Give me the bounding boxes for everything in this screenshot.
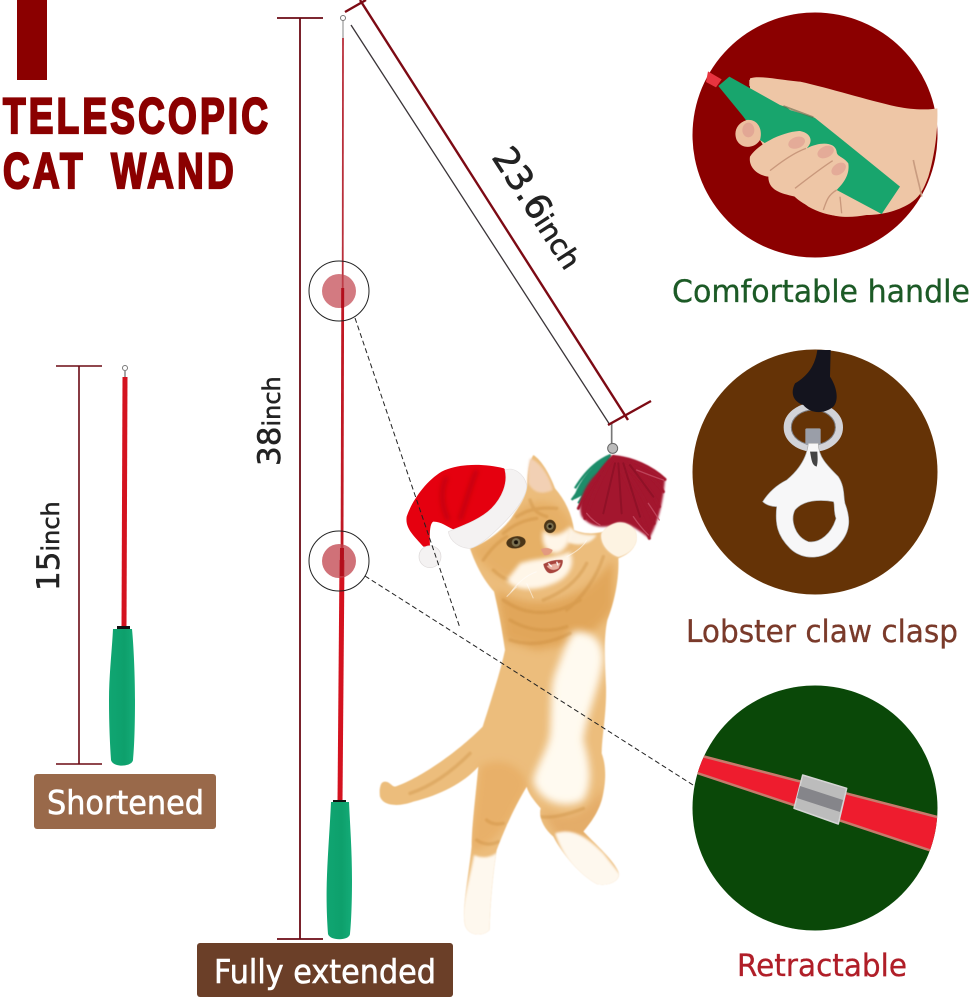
extended length label: 38inch	[252, 376, 288, 466]
title: CAT WAND	[3, 144, 237, 199]
cat body	[370, 447, 647, 940]
panel: comfortable handle	[692, 12, 938, 258]
title	[3, 0, 271, 199]
claw body	[763, 443, 849, 557]
red plume	[580, 456, 665, 538]
badge: fully extended: Fully extended	[214, 952, 436, 991]
callout: lower joint	[309, 531, 369, 591]
cat chest and leg whites	[533, 631, 603, 805]
title accent bar	[17, 0, 47, 80]
cat	[370, 447, 647, 940]
diagonal dimension	[345, 0, 651, 425]
santa hat	[406, 465, 527, 568]
label: lobster claw clasp: Lobster claw clasp	[686, 614, 958, 650]
grip	[718, 77, 900, 214]
ring	[787, 407, 839, 448]
extended dimension line	[277, 18, 323, 939]
index, middle and ring fingers	[735, 120, 761, 147]
extended wand	[327, 16, 352, 939]
feather toy	[572, 423, 665, 557]
cat fur stripes	[410, 500, 603, 844]
shortened dimension line	[56, 366, 102, 764]
shortened badge: Shortened	[47, 783, 204, 822]
dashed leader to upper joint	[355, 318, 460, 628]
icon: tube joint	[697, 756, 945, 853]
diagonal length label: 23.6inch	[483, 140, 591, 276]
title: TELESCOPIC	[3, 89, 271, 144]
icon: hand gripping handle	[706, 71, 937, 217]
shortened wand	[109, 366, 135, 766]
cord	[793, 350, 837, 412]
hanging wand line	[351, 25, 610, 425]
callout: upper joint	[309, 261, 369, 321]
shortened badge	[34, 774, 216, 829]
dashed leader to lower joint	[365, 576, 693, 785]
badge: fully extended	[197, 943, 453, 997]
green plume	[572, 455, 611, 503]
feather line and bell	[609, 423, 614, 443]
label: retractable: Retractable	[737, 948, 907, 984]
icon: clasp	[763, 350, 849, 557]
palm	[750, 77, 937, 217]
label: comfortable handle: Comfortable handle	[672, 274, 970, 310]
panel: retractable	[692, 686, 945, 930]
thumb	[749, 78, 817, 118]
cat face	[506, 458, 587, 598]
shortened length label: 15inch	[31, 501, 67, 591]
fur shading	[470, 502, 613, 850]
panel: lobster claw clasp	[692, 350, 938, 594]
cat paw over plume	[601, 522, 636, 557]
